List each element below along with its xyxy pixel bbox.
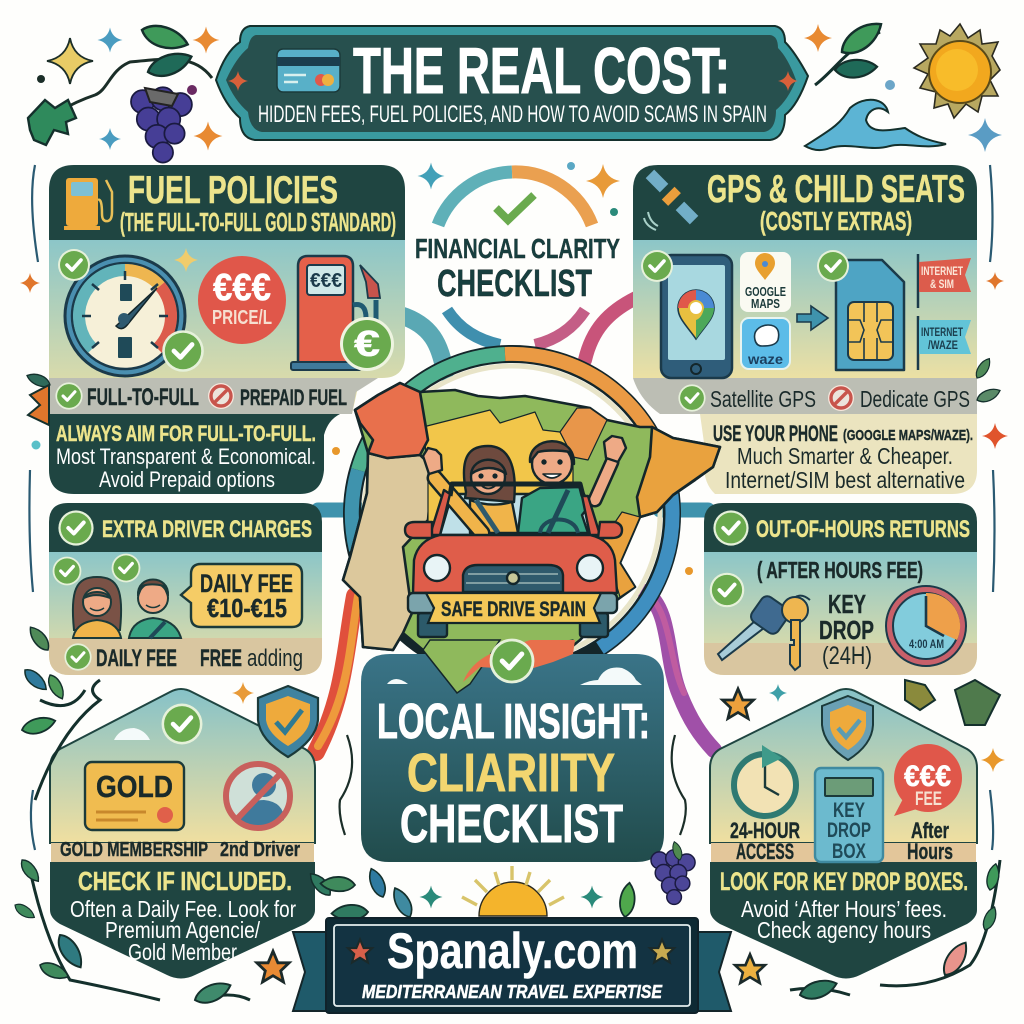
icon: satellite	[644, 170, 698, 230]
GPS advice text: (GOOGLE MAPS/WAZE).	[843, 427, 973, 444]
car	[450, 484, 583, 496]
central map circle ring	[352, 354, 673, 674]
title text: THE REAL COST:	[353, 34, 730, 107]
GPS option labels	[678, 384, 970, 412]
SIM card	[836, 260, 904, 370]
icon: keys	[718, 594, 810, 670]
euro badge: €	[354, 323, 380, 364]
title banner	[216, 26, 808, 140]
panel: gold membership hexagon: 2nd Driver	[220, 838, 300, 861]
banner: safe drive spain	[426, 593, 601, 623]
panel: key drop hexagon	[710, 689, 977, 978]
panel: out-of-hours returns	[704, 503, 977, 675]
decorative sun rising above footer	[462, 866, 564, 916]
fee labels: FREE	[200, 645, 242, 672]
flag: internet and waze	[918, 316, 971, 370]
key drop text: (24H)	[822, 642, 872, 670]
membership labels: GOLD MEMBERSHIP	[60, 838, 208, 861]
membership advice: CHECK IF INCLUDED.	[78, 866, 292, 896]
google maps tile: GOOGLE	[745, 285, 786, 299]
heading: FUEL POLICIES	[128, 169, 338, 212]
panel: gold membership hexagon	[50, 686, 318, 978]
panel: local insight: CHECKLIST	[400, 794, 623, 854]
callout: daily fee: €10-€15	[207, 593, 287, 623]
connectors between panels and map	[316, 298, 714, 752]
fuel option labels: FULL-TO-FULL	[87, 384, 199, 411]
key drop advice: Avoid ‘After Hours’ fees.	[741, 896, 947, 922]
GPS advice text: USE YOUR PHONE	[713, 421, 838, 446]
price circle: €€€	[213, 267, 271, 309]
price circle	[198, 256, 286, 344]
fee speech bubble: €€€	[904, 760, 951, 793]
fuel advice text	[56, 421, 316, 492]
windscreen	[440, 494, 590, 535]
decorative vines and stars: top left	[28, 18, 222, 163]
panel: extra driver charges	[49, 503, 322, 675]
access labels: 24-HOUR	[730, 818, 800, 843]
fee speech bubble	[894, 744, 962, 816]
key drop box	[815, 768, 883, 863]
fuel option labels: PREPAID FUEL	[240, 385, 347, 410]
price circle: PRICE/L	[212, 307, 272, 329]
panel: GPS and child seats: (COSTLY EXTRAS)	[760, 206, 912, 236]
access labels: ACCESS	[736, 839, 794, 864]
google maps tile: MAPS	[751, 297, 780, 311]
key drop text: DROP	[819, 615, 874, 645]
brand name: Spanaly.com	[387, 923, 638, 979]
access labels: After	[911, 818, 949, 843]
key drop text	[819, 589, 874, 670]
GPS option labels: Dedicate GPS	[860, 386, 970, 412]
panel: local insight	[361, 639, 664, 862]
membership advice: Often a Daily Fee. Look for	[70, 896, 296, 922]
fee labels	[64, 643, 303, 672]
key drop box: KEY	[833, 799, 865, 822]
fuel advice text: ALWAYS AIM FOR FULL-TO-FULL.	[56, 421, 316, 446]
membership advice	[70, 866, 296, 965]
key drop text: KEY	[828, 589, 866, 619]
insight heading: LOCAL INSIGHT:	[377, 695, 650, 749]
flag: internet and waze: /WAZE	[928, 338, 958, 352]
clock: 4:00 AM	[909, 637, 944, 651]
key drop advice: Check agency hours	[757, 917, 931, 943]
membership advice: Gold Member	[128, 939, 237, 965]
google maps tile	[740, 252, 791, 312]
petrol pump: €€€	[310, 270, 342, 292]
map of Iberia	[343, 383, 720, 680]
gold card: GOLD	[96, 769, 173, 804]
euro badge	[340, 317, 394, 371]
fuel option labels	[55, 382, 347, 411]
icon: shield	[258, 686, 318, 757]
side leaves	[25, 369, 52, 391]
fee speech bubble: FEE	[915, 789, 942, 810]
flag: internet and SIM: INTERNET	[921, 264, 963, 278]
fuel advice text: Most Transparent & Economical.	[56, 444, 316, 469]
access labels: Hours	[907, 839, 953, 864]
illustration: couple in red car	[405, 436, 626, 637]
GPS advice text: Much Smarter & Cheaper.	[737, 443, 953, 469]
GPS advice text: Internet/SIM best alternative	[725, 467, 965, 493]
checklist title: FINANCIAL CLARITY	[415, 233, 620, 264]
footer banner	[293, 918, 731, 1013]
key drop box: BOX	[832, 840, 866, 863]
icon: fuel pump	[64, 178, 112, 230]
icon: 24 hour clock	[734, 745, 796, 816]
membership advice: Premium Agencie/	[105, 917, 261, 943]
checklist gauge: CHECKLIST	[437, 263, 592, 305]
callout: daily fee: DAILY FEE	[200, 570, 293, 598]
waze tile: waze	[747, 351, 783, 367]
tagline: MEDITERRANEAN TRAVEL EXPERTISE	[362, 982, 663, 1002]
callout: daily fee	[181, 564, 302, 627]
checklist gauge	[415, 162, 620, 345]
heading: EXTRA DRIVER CHARGES	[102, 516, 312, 543]
fee labels: adding	[247, 645, 303, 672]
vines around lower hexagons	[13, 665, 1003, 1006]
clock	[886, 586, 966, 666]
gold card	[85, 762, 184, 830]
panel: fuel policies: (THE FULL-TO-FULL GOLD STANDARD)	[120, 207, 396, 237]
petrol pump	[291, 256, 380, 370]
banner: safe drive spain: SAFE DRIVE SPAIN	[441, 598, 586, 621]
panel: GPS and child seats	[633, 165, 977, 494]
flag: internet and SIM	[918, 254, 971, 308]
man	[518, 436, 626, 533]
arrow	[797, 306, 828, 330]
woman	[423, 446, 518, 533]
fee labels: DAILY FEE	[96, 645, 177, 672]
GPS option labels: Satellite GPS	[710, 386, 816, 412]
panel: local insight: CLIARIITY	[407, 743, 615, 803]
fuel gauge	[65, 256, 185, 376]
icon: shield	[822, 696, 873, 760]
side flourishes and small stars	[29, 165, 994, 850]
GPS advice text	[713, 421, 973, 493]
panel: fuel policies	[49, 165, 405, 494]
flag: internet and waze: INTERNET	[921, 325, 963, 339]
phone with map pin	[661, 255, 732, 378]
decorative sun, wave and leaves: top right	[804, 18, 1002, 152]
badges	[58, 249, 90, 281]
panel: out-of-hours returns: ( AFTER HOURS FEE)	[757, 557, 923, 583]
flag: internet and SIM: & SIM	[930, 277, 954, 291]
icon: credit card	[277, 49, 340, 92]
people	[73, 577, 181, 638]
key drop box: DROP	[827, 819, 871, 842]
fuel advice text: Avoid Prepaid options	[99, 467, 275, 492]
decorative leaves and grapes near footer	[307, 841, 695, 922]
icon: no second driver	[226, 764, 290, 828]
waze tile	[741, 318, 790, 369]
key drop advice	[720, 868, 968, 943]
decorative small stars	[20, 272, 1008, 983]
access labels	[730, 818, 953, 864]
